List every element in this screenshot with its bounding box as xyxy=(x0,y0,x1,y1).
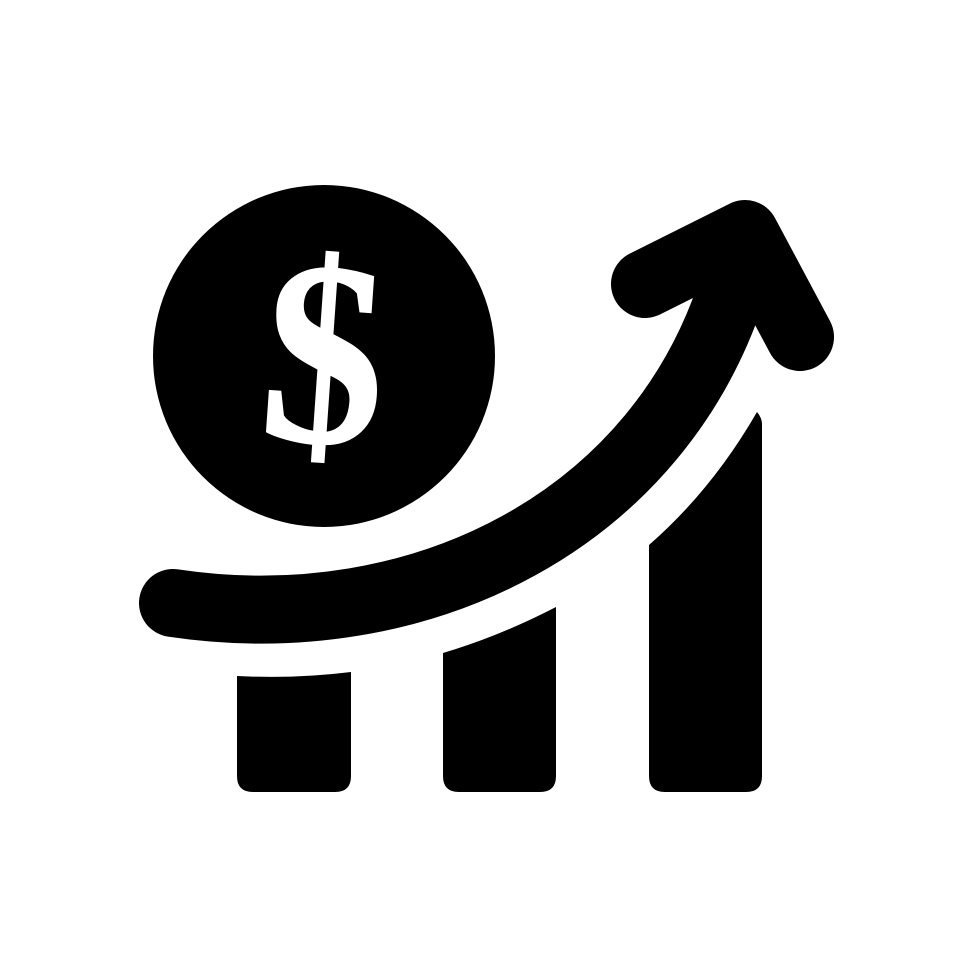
bar chart xyxy=(237,412,762,792)
bar 2 xyxy=(443,607,556,792)
arrow: growth curve xyxy=(173,234,800,610)
bar 1 xyxy=(237,672,351,792)
icon: dollar coin xyxy=(153,185,495,527)
icon: dollar coin: $ xyxy=(254,204,396,503)
bar 3 xyxy=(649,412,762,792)
